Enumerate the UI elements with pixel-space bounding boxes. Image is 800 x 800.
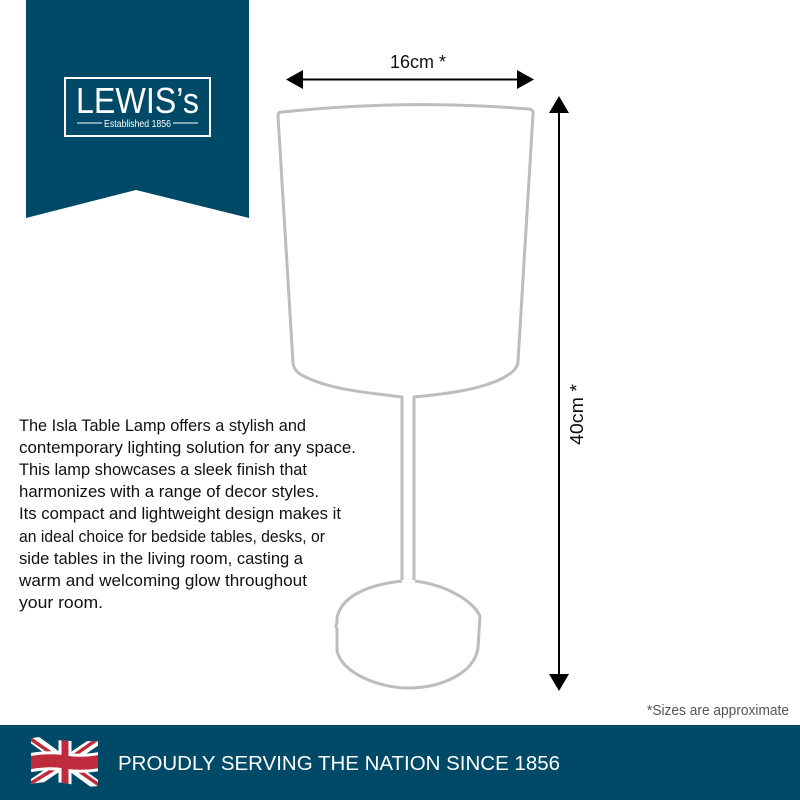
product description: side tables in the living room, casting a bbox=[19, 550, 304, 568]
size note: *Sizes are approximate bbox=[647, 703, 789, 719]
product description: This lamp showcases a sleek finish that bbox=[19, 461, 307, 479]
product description: an ideal choice for bedside tables, desks, or bbox=[19, 528, 325, 546]
width label: 16cm * bbox=[390, 51, 446, 72]
lamp shade and neck bbox=[278, 105, 533, 580]
logo: LEWIS’s bbox=[76, 80, 199, 121]
brand banner bbox=[26, 0, 249, 218]
product description: Its compact and lightweight design makes it bbox=[19, 505, 341, 523]
product description: warm and welcoming glow throughout bbox=[18, 572, 307, 590]
height arrow bbox=[549, 96, 569, 691]
product description: your room. bbox=[19, 594, 103, 612]
product description bbox=[18, 417, 356, 612]
footer band bbox=[0, 725, 800, 800]
footer slogan: PROUDLY SERVING THE NATION SINCE 1856 bbox=[118, 752, 560, 775]
icon: union jack flag bbox=[31, 737, 98, 787]
lamp base bbox=[336, 581, 480, 688]
product description: harmonizes with a range of decor styles. bbox=[19, 483, 319, 501]
product description: The Isla Table Lamp offers a stylish and bbox=[19, 417, 306, 435]
product description: contemporary lighting solution for any space. bbox=[19, 439, 356, 457]
width arrow bbox=[286, 70, 534, 89]
lamp outline bbox=[278, 105, 533, 688]
logo: Established 1856 bbox=[104, 119, 171, 130]
height label: 40cm * bbox=[566, 384, 587, 445]
logo bbox=[65, 78, 210, 136]
